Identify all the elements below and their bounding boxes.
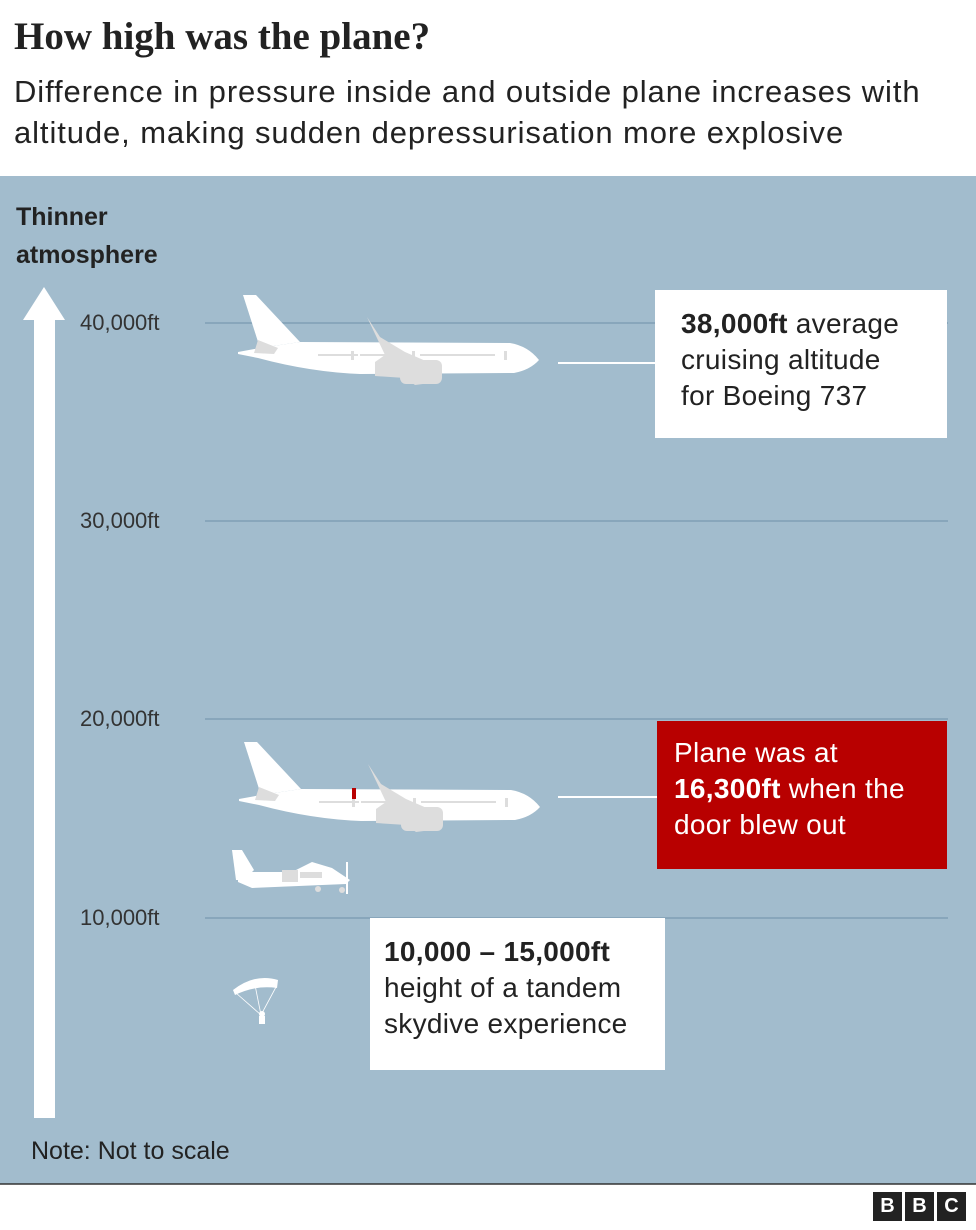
connector lines [558,363,657,797]
axis labels: 10,000ft [80,905,160,930]
axis labels: 20,000ft [80,706,160,731]
callout: 38,000ft: for Boeing 737 [681,380,867,411]
callout: skydive [370,918,665,1070]
axis heading: atmosphere [16,241,158,269]
logo: BBC: B [880,1195,895,1217]
callout: 16,300ft: Plane was at [674,737,838,768]
subtitle [14,74,920,150]
divider [0,1183,976,1185]
icon: parachute [233,978,278,1024]
callout: 38,000ft [655,290,947,438]
note: Note: Not to scale [31,1137,230,1165]
callout: skydive: height of a tandem [384,972,621,1003]
axis labels: 40,000ft [80,310,160,335]
callout: skydive: 10,000 – 15,000ft [384,936,610,967]
logo: BBC: B [912,1195,927,1217]
callout: 38,000ft: cruising altitude [681,344,881,375]
subtitle: altitude, making sudden depressurisation more explosive [14,115,844,150]
icon: plane at cruising altitude [238,295,539,385]
logo: BBC: C [944,1195,959,1217]
callout: 16,300ft: 16,300ft when the [674,773,905,804]
callout: skydive: skydive experience [384,1008,628,1039]
subtitle: Difference in pressure inside and outside plane increases with [14,74,920,109]
callout: 16,300ft: door blew out [674,809,846,840]
arrow: altitude [23,287,65,1118]
axis heading [16,203,158,269]
logo: BBC [873,1192,966,1221]
icon: plane at 16,300ft [239,742,540,832]
callout: 16,300ft [657,721,947,869]
title: How high was the plane? [14,15,430,58]
callout: 38,000ft: 38,000ft average [681,308,899,339]
icon: small plane [232,850,350,894]
axis labels: 30,000ft [80,508,160,533]
axis heading: Thinner [16,203,108,231]
